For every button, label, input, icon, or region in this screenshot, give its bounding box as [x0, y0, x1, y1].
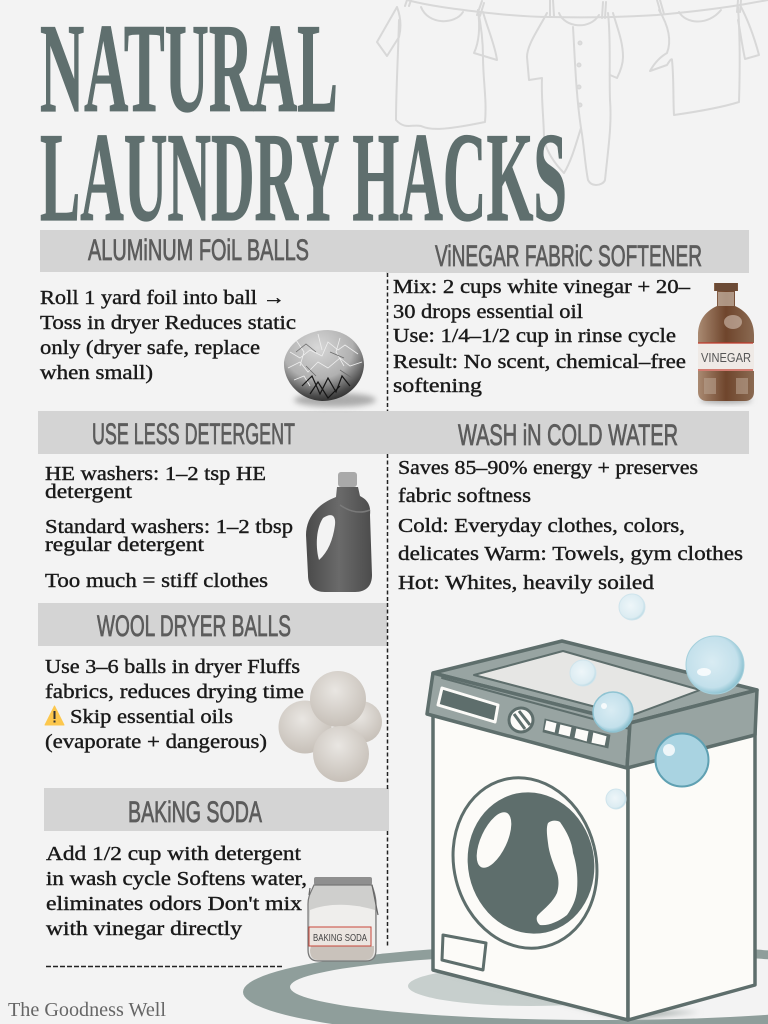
title: NATURAL	[40, 0, 338, 139]
icon: vinegar bottle	[698, 283, 754, 403]
text: wool ball instructions: Skip essential oils	[70, 706, 233, 728]
panel: wash in cold water	[398, 419, 743, 594]
clothespins	[405, 0, 741, 18]
icon: detergent bottle	[306, 472, 372, 592]
heading: aluminum foil balls: ALUMiNUM FOiL BALLS	[88, 234, 309, 267]
text: aluminum foil instructions	[40, 287, 296, 384]
text: wool ball instructions: (evaporate + dangerous)	[45, 731, 267, 753]
text: vinegar instructions: Result: No scent, chemical–free	[393, 351, 686, 373]
text: aluminum foil instructions: Toss in dryer Reduces static	[40, 312, 296, 334]
icon: baking soda jar: BAKING SODA	[313, 933, 367, 944]
text: baking soda instructions: Add 1/2 cup with detergent	[46, 843, 302, 865]
text: cold water instructions: Cold: Everyday clothes, colors,	[398, 515, 685, 537]
title	[40, 0, 567, 248]
panel: wool dryer balls	[45, 610, 382, 782]
washer body	[433, 705, 755, 1020]
text: vinegar instructions	[393, 276, 691, 397]
text: baking soda instructions	[46, 843, 307, 940]
text: detergent instructions: detergent	[45, 481, 133, 503]
icon: vinegar bottle: VINEGAR	[701, 350, 751, 365]
text: wool ball instructions: Use 3–6 balls in dryer Fluffs	[45, 656, 300, 678]
footer credit: The Goodness Well	[8, 999, 166, 1021]
icon: wool dryer balls	[278, 671, 382, 782]
door	[435, 762, 615, 964]
text: cold water instructions: delicates Warm: Towels, gym clothes	[398, 543, 743, 565]
text: vinegar instructions: 30 drops essential oil	[393, 301, 583, 323]
heading: use less detergent: USE LESS DETERGENT	[92, 418, 295, 451]
panel: use less detergent	[45, 418, 372, 592]
washer lid and control panel	[427, 641, 757, 768]
text: vinegar instructions: softening	[393, 375, 482, 397]
panel: aluminum foil balls	[40, 234, 376, 407]
icon: baking soda jar	[308, 877, 378, 961]
text: detergent instructions	[45, 463, 293, 592]
panel: vinegar fabric softener	[393, 240, 754, 403]
buttons	[543, 719, 610, 748]
text: baking soda instructions: with vinegar directly	[46, 918, 242, 940]
text: detergent instructions: regular detergent	[45, 534, 205, 556]
heading: baking soda: BAKiNG SODA	[128, 796, 262, 829]
heading: wool dryer balls: WOOL DRYER BALLS	[97, 610, 291, 643]
bubbles	[570, 594, 744, 809]
text: aluminum foil instructions: Roll 1 yard foil into ball →	[40, 287, 285, 309]
text: vinegar instructions: Use: 1/4–1/2 cup in rinse cycle	[393, 325, 676, 347]
text: cold water instructions: Hot: Whites, heavily soiled	[398, 572, 654, 594]
text: wool ball instructions: fabrics, reduces drying time	[45, 681, 304, 703]
text: cold water instructions: Saves 85–90% energy + preserves	[398, 457, 698, 479]
dashed dividers	[46, 273, 388, 966]
text: aluminum foil instructions: when small)	[40, 362, 153, 384]
text: baking soda instructions: eliminates odors Don't mix	[46, 893, 302, 915]
clothesline illustration	[377, 0, 768, 185]
text: baking soda instructions: in wash cycle Softens water,	[46, 868, 307, 890]
text: vinegar instructions: Mix: 2 cups white vinegar + 20–	[393, 276, 691, 298]
display window	[438, 688, 498, 722]
shirt left	[377, 7, 497, 129]
text: wool ball instructions	[45, 656, 304, 753]
floor ring	[243, 944, 768, 1024]
text: aluminum foil instructions: only (dryer safe, replace	[40, 337, 260, 359]
washer shadow	[433, 968, 700, 1020]
dial	[509, 708, 533, 732]
shirt right	[650, 5, 759, 115]
text: cold water instructions	[398, 457, 743, 594]
illustration: washing machine	[427, 594, 757, 1020]
text: cold water instructions: fabric softness	[398, 485, 531, 507]
onesie	[527, 13, 623, 185]
text: detergent instructions: HE washers: 1–2 tsp HE	[45, 463, 266, 485]
heading bars	[38, 230, 749, 831]
panel: baking soda	[46, 796, 378, 961]
text: detergent instructions: Too much = stiff clothes	[45, 570, 268, 592]
icon: foil ball	[284, 330, 376, 407]
text: detergent instructions: Standard washers: 1–2 tbsp	[45, 516, 293, 538]
drawer	[442, 935, 486, 970]
icon: warning sign	[45, 706, 64, 725]
